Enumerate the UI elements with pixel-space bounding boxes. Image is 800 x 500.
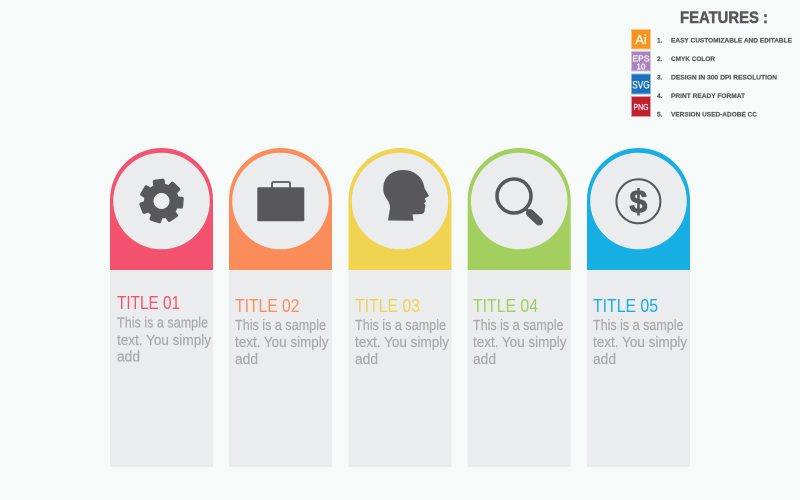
text block 04 xyxy=(473,318,567,368)
feature list: CMYK COLOR xyxy=(671,56,715,63)
panel: card 05 xyxy=(587,148,690,467)
feature list: 2. xyxy=(657,56,663,63)
feature list xyxy=(657,38,793,118)
text block 04: text. You simply xyxy=(473,335,567,351)
text block 04: add xyxy=(473,352,496,368)
feature list: PRINT READY FORMAT xyxy=(671,93,745,100)
feature list: 4. xyxy=(657,93,663,100)
text block 05 xyxy=(593,318,688,368)
text block 03: text. You simply xyxy=(355,335,450,351)
feature list: 1. xyxy=(657,38,663,44)
icon: briefcase xyxy=(257,182,304,221)
panel: card 04 xyxy=(468,148,571,467)
text block 05: add xyxy=(593,352,616,368)
badge: PNG: PNG xyxy=(634,102,648,112)
feature list: DESIGN IN 300 DPI RESOLUTION xyxy=(671,74,777,82)
feature list: 3. xyxy=(657,74,663,82)
text block 02: add xyxy=(235,352,258,368)
text block 01 xyxy=(117,316,212,366)
text block 03 xyxy=(355,318,450,368)
icon: gear xyxy=(139,178,184,224)
panel: card 02 xyxy=(229,148,332,467)
icon: dollar xyxy=(616,179,660,223)
panel: card 01 xyxy=(110,148,213,467)
badge: EPS 10: 10 xyxy=(637,62,646,72)
text block 03: This is a sample xyxy=(355,318,446,334)
text block 01: text. You simply xyxy=(117,333,212,349)
icon: head xyxy=(383,170,429,221)
title 03: TITLE 03 xyxy=(355,295,420,316)
text block 01: add xyxy=(117,350,140,366)
title 02: TITLE 02 xyxy=(235,295,300,316)
text block 01: This is a sample xyxy=(117,316,208,332)
feature list: VERSION USED-ADOBE CC xyxy=(671,112,757,118)
text block 02: text. You simply xyxy=(235,335,329,351)
badge: SVG: SVG xyxy=(632,80,650,92)
text block 03: add xyxy=(355,352,378,368)
badge: Ai: Ai xyxy=(635,32,647,47)
icon: magnifier xyxy=(497,179,539,222)
badge: PNG xyxy=(632,96,650,116)
feature list: 5. xyxy=(657,112,663,118)
text block 04: This is a sample xyxy=(473,318,564,334)
text block 02 xyxy=(235,318,329,368)
text block 05: This is a sample xyxy=(593,318,684,334)
badge: SVG xyxy=(632,74,650,94)
heading: features: FEATURES : xyxy=(680,9,768,27)
badge: EPS 10: EPS xyxy=(632,54,650,64)
panel: features xyxy=(632,9,793,118)
panel: card 03 xyxy=(348,148,452,467)
icon: dollar: $ xyxy=(630,184,648,220)
title 01: TITLE 01 xyxy=(117,292,180,313)
text block 02: This is a sample xyxy=(235,318,326,334)
feature list: EASY CUSTOMIZABLE AND EDITABLE xyxy=(671,38,793,44)
title 04: TITLE 04 xyxy=(473,295,538,316)
badge: Ai xyxy=(632,30,650,49)
badge: EPS 10 xyxy=(632,52,650,72)
text block 05: text. You simply xyxy=(593,335,688,351)
title 05: TITLE 05 xyxy=(593,295,658,316)
